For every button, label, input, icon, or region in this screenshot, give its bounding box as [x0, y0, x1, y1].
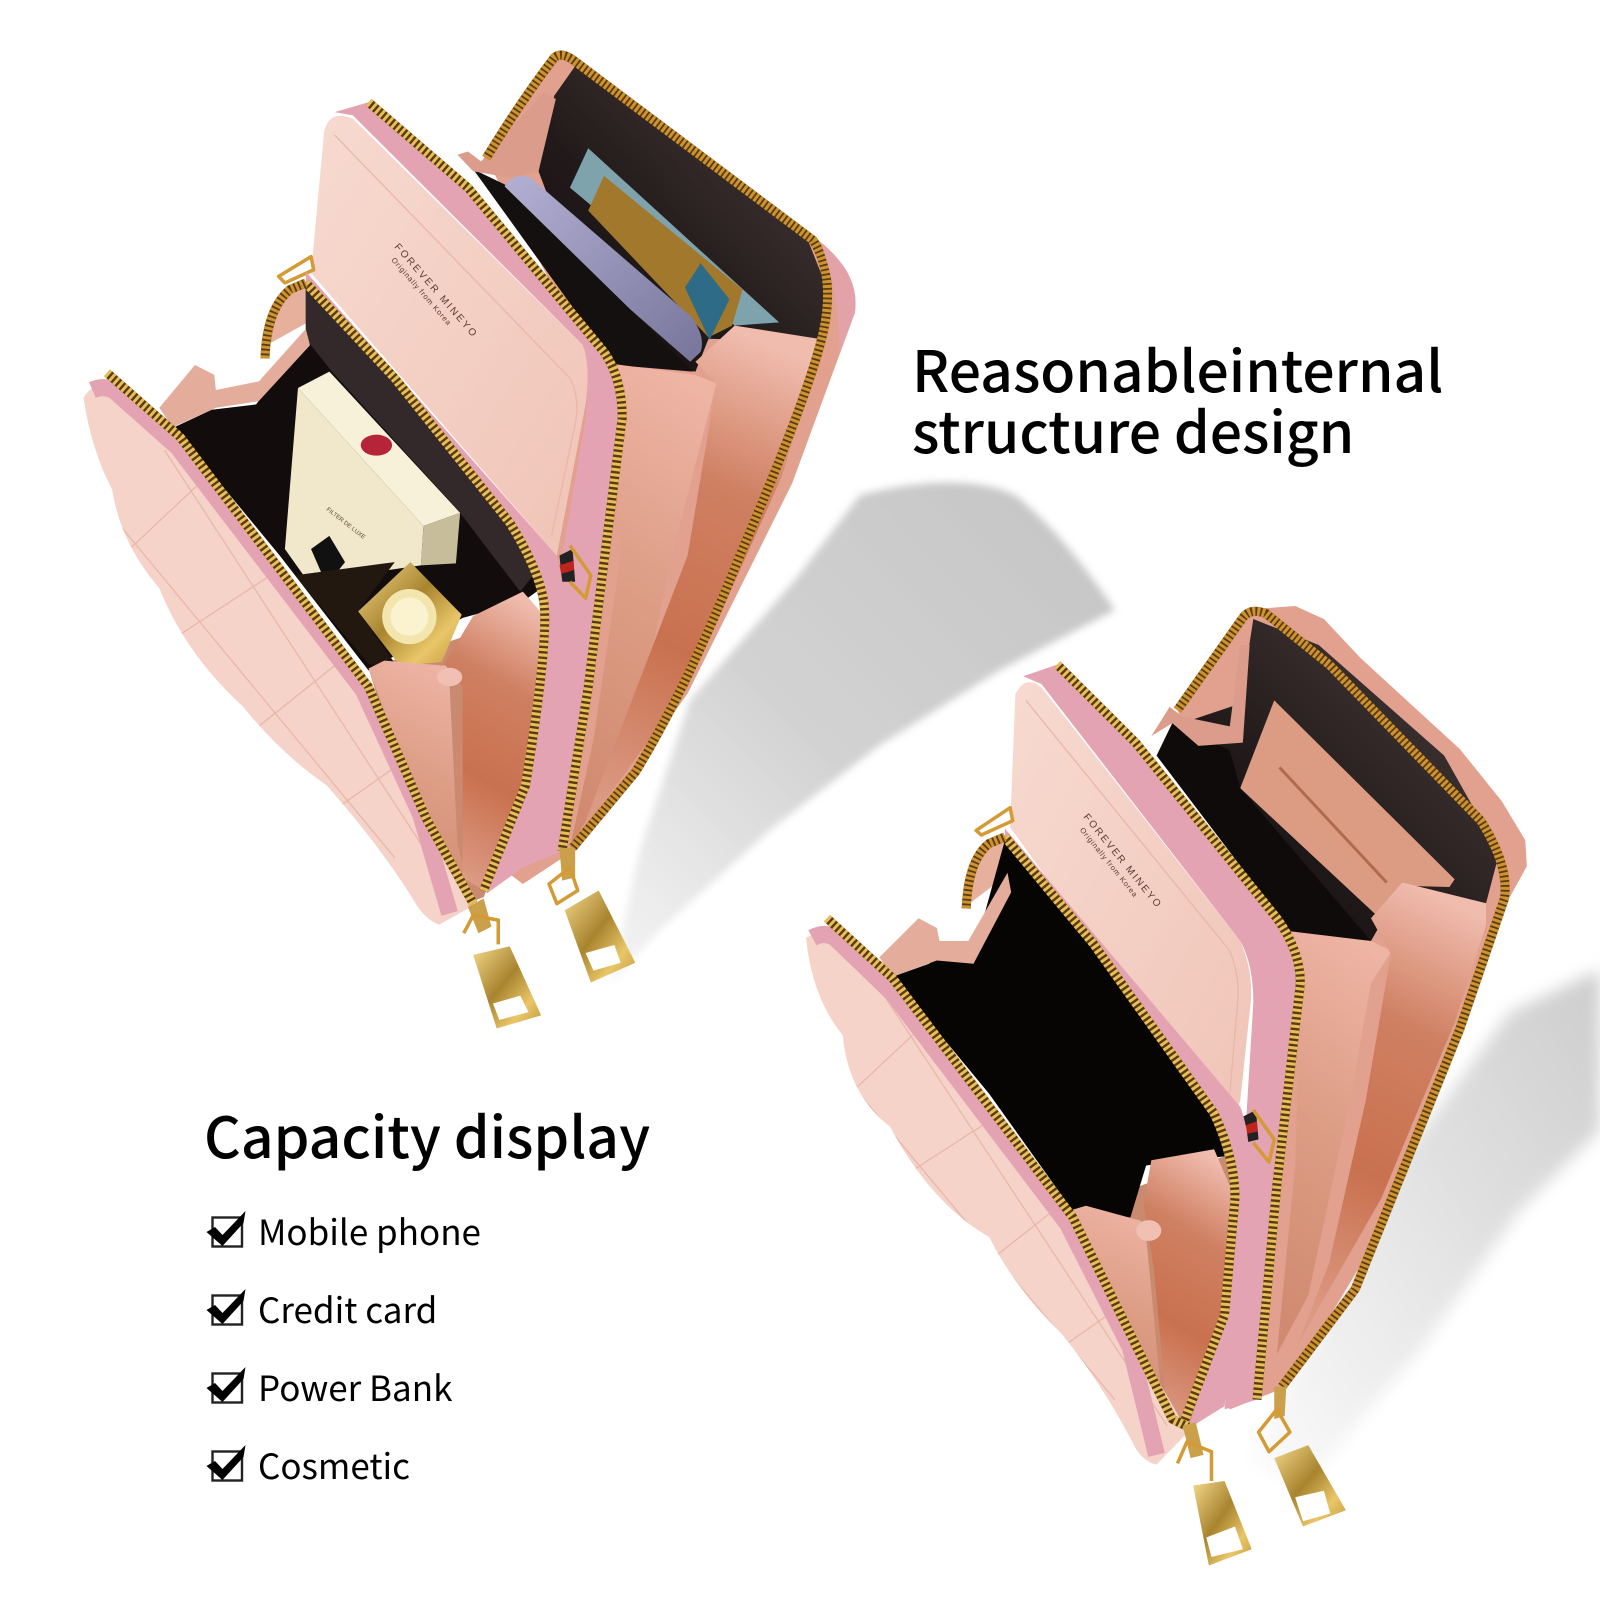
zipper pull 1 [464, 898, 541, 1028]
middle flap panel [311, 116, 588, 556]
back loop [457, 92, 556, 178]
heading: internal structure: structure design [912, 388, 1354, 470]
panel pink tape [812, 935, 1157, 1455]
quilted front panel [806, 928, 1188, 1465]
flap stitch [335, 135, 577, 536]
box label: FILTER DE LUXE [325, 507, 366, 541]
front pink tape [306, 272, 564, 894]
back pocket left [570, 364, 716, 848]
checklist [206, 1205, 481, 1490]
front zipper right [966, 837, 1235, 1426]
back pocket right [1298, 882, 1486, 1344]
bag 1: filled with contents [84, 53, 856, 1028]
pocket knot [437, 668, 462, 686]
pink zipper tape [335, 102, 622, 868]
panel pink tape [92, 388, 450, 914]
card box [285, 372, 460, 585]
front compartment back band [267, 280, 314, 345]
quilting lines [122, 450, 421, 858]
quilted front panel [84, 381, 471, 925]
dark lining [539, 66, 831, 372]
pink zipper tape [1023, 665, 1300, 1409]
cards [570, 148, 779, 340]
bag 2: empty [806, 606, 1527, 1566]
front pocket right [1143, 1149, 1235, 1429]
front dark interior [174, 283, 541, 670]
panel zipper [107, 373, 473, 904]
brand logo on bag 1: FOREVER MINEYO [392, 242, 480, 341]
zipper pull 2 [1259, 1387, 1346, 1526]
item: cosmetic: Cosmetic [258, 1439, 410, 1490]
card slot [1279, 767, 1387, 882]
middle zipper [1057, 665, 1300, 1400]
interior top lining [306, 283, 533, 592]
item: power bank: Power Bank [258, 1361, 452, 1412]
zipper pull 1 [1177, 1422, 1252, 1566]
front pocket underlay [369, 608, 549, 910]
middle zipper [369, 102, 622, 851]
pink outer edge [821, 243, 856, 355]
upper ring [976, 808, 1013, 835]
red tab and ring [559, 546, 591, 598]
shadow of upper bag [610, 482, 1115, 985]
black liner [1157, 723, 1371, 941]
heading: internal structure: Reasonableinternal [912, 327, 1443, 409]
power bank [505, 176, 702, 362]
back compartment shell [1177, 606, 1527, 1409]
zipper pull 2 [549, 848, 635, 983]
heading: internal structure [912, 327, 1443, 470]
pocket knot [1136, 1220, 1161, 1241]
quilting lines [832, 996, 1167, 1426]
peach loop left [159, 329, 310, 427]
back pocket right [580, 326, 818, 835]
shadow of lower bag [1250, 970, 1600, 1490]
front compartment back band [967, 835, 1010, 905]
upper ring [279, 257, 314, 283]
item: credit card: Credit card [258, 1283, 437, 1334]
peach loop left [879, 873, 1011, 977]
front pocket underlay [1073, 1152, 1235, 1445]
flap stitch [1026, 700, 1238, 1094]
red tab and ring [1243, 1110, 1274, 1162]
brand logo on bag 2: FOREVER MINEYO [1081, 812, 1164, 911]
back loop [1151, 645, 1250, 746]
brand logo on bag 2: Originally from Korea [1078, 826, 1140, 899]
back compartment shell [486, 53, 856, 884]
wallet card pocket [1240, 700, 1455, 915]
back pocket left [1277, 931, 1392, 1354]
back zipper [486, 55, 828, 848]
lipstick [295, 562, 462, 670]
front pocket right [444, 592, 549, 891]
black liner [473, 169, 693, 372]
front pink tape [1005, 828, 1250, 1429]
panel zipper [827, 918, 1188, 1427]
item: mobile phone: Mobile phone [258, 1205, 481, 1256]
front pocket left [1073, 1206, 1183, 1426]
dark lining [1172, 619, 1499, 941]
back zipper [1177, 611, 1505, 1387]
front zipper right [265, 283, 545, 891]
brand logo on bag 1: Originally from Korea [389, 256, 453, 327]
front pocket left [369, 661, 473, 904]
front black interior [892, 840, 1230, 1217]
heading: capacity display: Capacity display [204, 1093, 650, 1175]
flap panel [1010, 682, 1251, 1133]
